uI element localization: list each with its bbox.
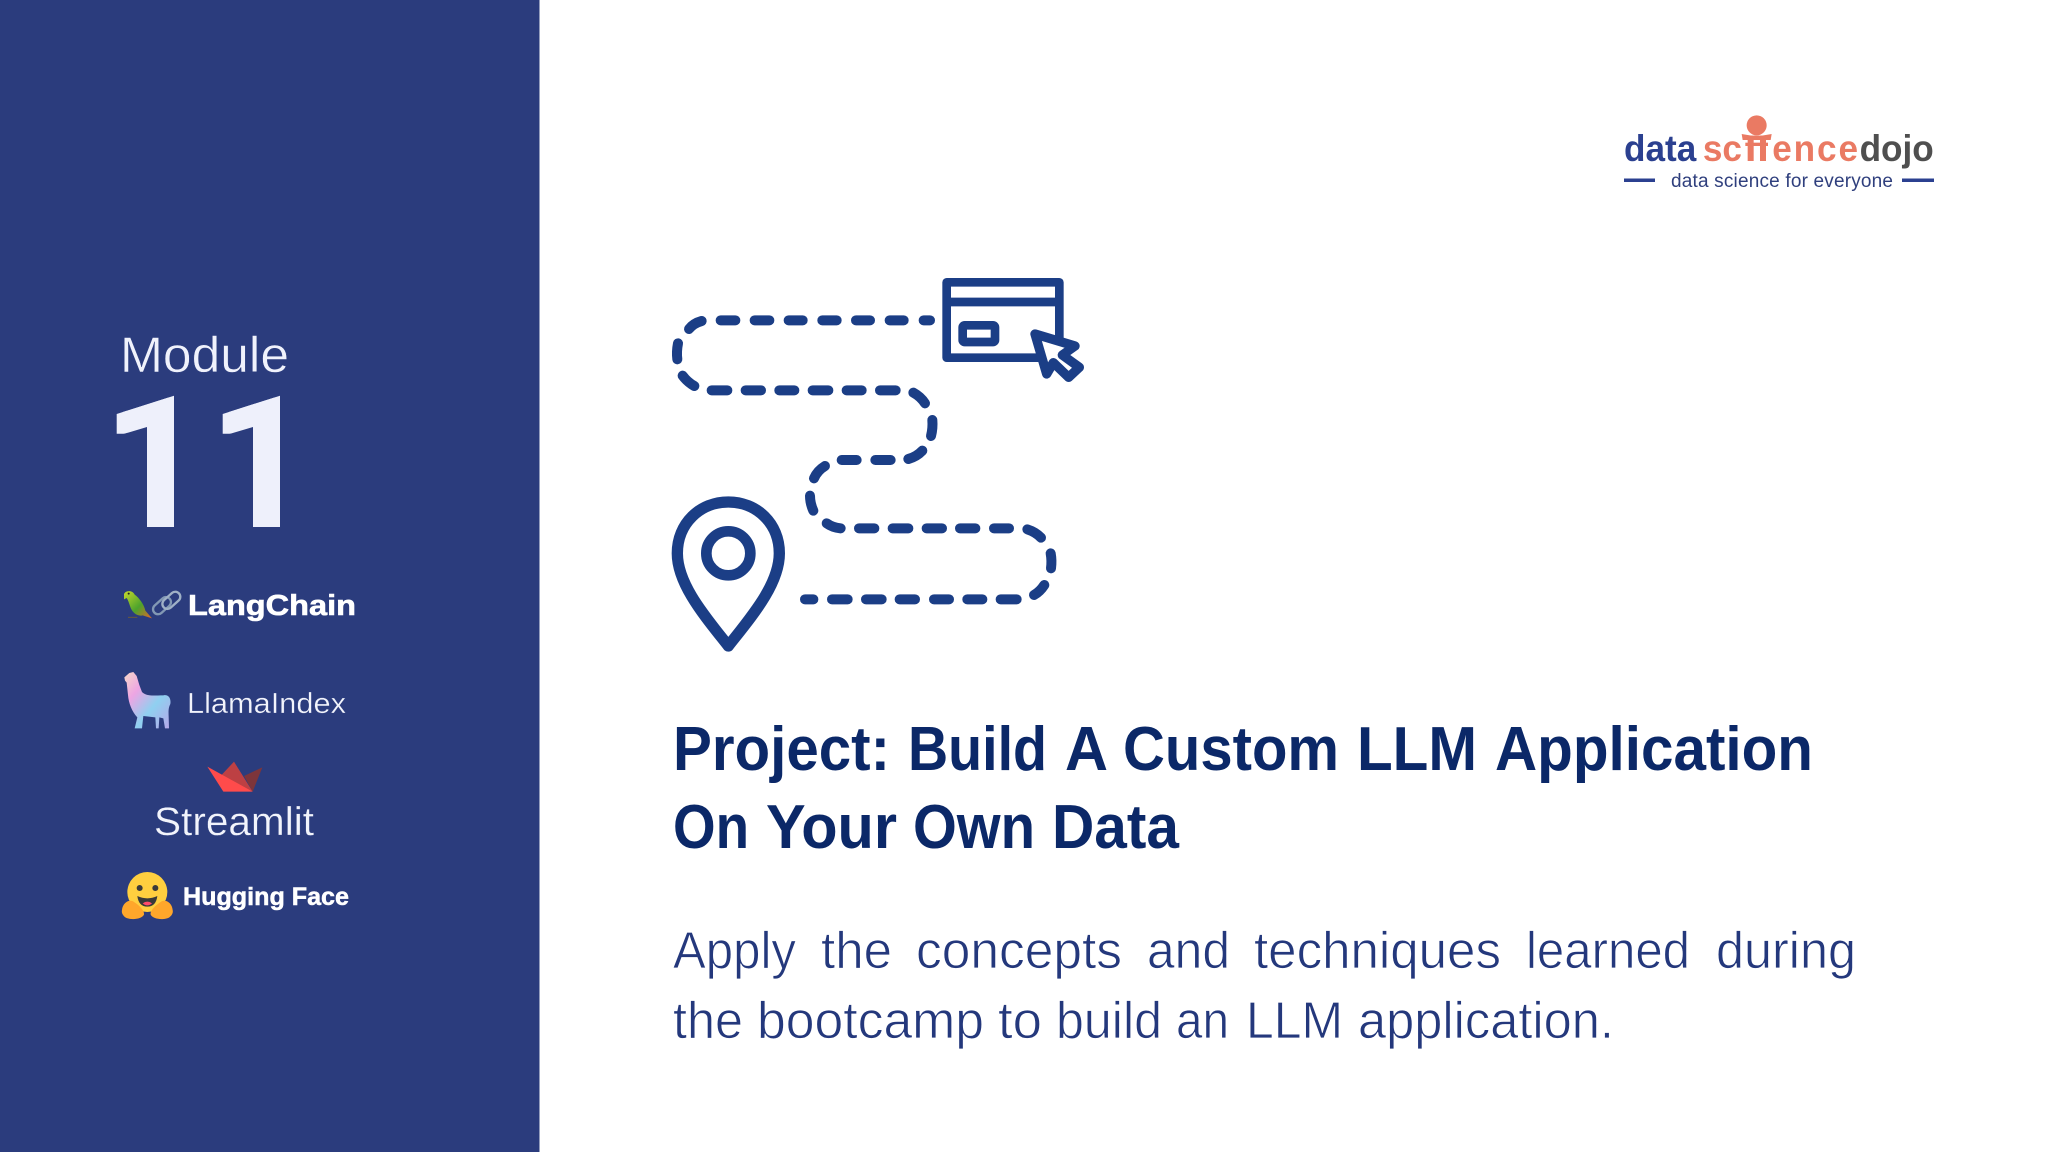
logo wordmark: sc bbox=[1703, 127, 1742, 169]
logo: Hugging Face bbox=[122, 872, 349, 919]
body text: and bbox=[1147, 922, 1230, 980]
module label: Module bbox=[120, 327, 289, 383]
heading: On bbox=[673, 793, 749, 862]
body text: build bbox=[1056, 992, 1162, 1050]
heading: Your bbox=[766, 793, 897, 862]
heading: Data bbox=[1052, 793, 1179, 862]
body text: concepts bbox=[916, 922, 1122, 980]
heading: Own bbox=[913, 793, 1035, 862]
heading bbox=[673, 715, 1813, 862]
body text bbox=[673, 922, 1856, 1050]
icon: boat bbox=[207, 762, 262, 792]
logo: data science dojo bbox=[1624, 115, 1934, 192]
body text: bootcamp bbox=[757, 992, 984, 1050]
icon: location pin bbox=[677, 502, 779, 646]
heading: A bbox=[1065, 715, 1108, 784]
logo wordmark: data bbox=[1624, 127, 1697, 169]
body text: the bbox=[821, 922, 892, 980]
logo: LlamaIndex bbox=[124, 672, 347, 728]
body text: application. bbox=[1358, 992, 1614, 1050]
Hugging Face wordmark: Hugging Face bbox=[183, 883, 349, 911]
module number bbox=[116, 396, 280, 527]
body text: the bbox=[673, 992, 743, 1050]
Streamlit wordmark: Streamlit bbox=[154, 800, 314, 844]
heading: LLM bbox=[1357, 715, 1477, 784]
icon: route map from card to pin bbox=[677, 282, 1079, 646]
body text: to bbox=[998, 992, 1042, 1050]
body text: techniques bbox=[1254, 922, 1501, 980]
icon: chain link bbox=[151, 590, 182, 616]
icon: browser card bbox=[947, 282, 1059, 358]
body text: learned bbox=[1526, 922, 1690, 980]
icon: cursor bbox=[1035, 334, 1079, 377]
heading: Custom bbox=[1123, 715, 1339, 784]
module number: 1 bbox=[103, 317, 212, 583]
module number: 1 bbox=[209, 317, 318, 583]
heading: Project: bbox=[673, 715, 890, 784]
heading: Application bbox=[1495, 715, 1813, 784]
heading: Build bbox=[908, 715, 1047, 784]
icon: llama bbox=[124, 672, 171, 728]
logo wordmark: ence bbox=[1772, 127, 1860, 169]
body text: an bbox=[1176, 992, 1229, 1050]
LlamaIndex wordmark: LlamaIndex bbox=[187, 688, 347, 720]
body text: Apply bbox=[673, 922, 796, 980]
body text: LLM bbox=[1246, 992, 1343, 1050]
panel: left sidebar bbox=[0, 0, 540, 1152]
body text: during bbox=[1716, 922, 1856, 980]
dashed route bbox=[677, 320, 1051, 599]
logo: LangChain bbox=[124, 590, 356, 622]
tagline: data science for everyone bbox=[1671, 171, 1893, 192]
icon: parrot bbox=[124, 591, 152, 618]
icon: hugging face emoji bbox=[122, 872, 173, 919]
logo: Streamlit bbox=[154, 762, 314, 844]
LangChain wordmark: LangChain bbox=[188, 590, 356, 622]
icon: torii gate and sun bbox=[1742, 115, 1772, 161]
logo wordmark: dojo bbox=[1860, 127, 1934, 169]
